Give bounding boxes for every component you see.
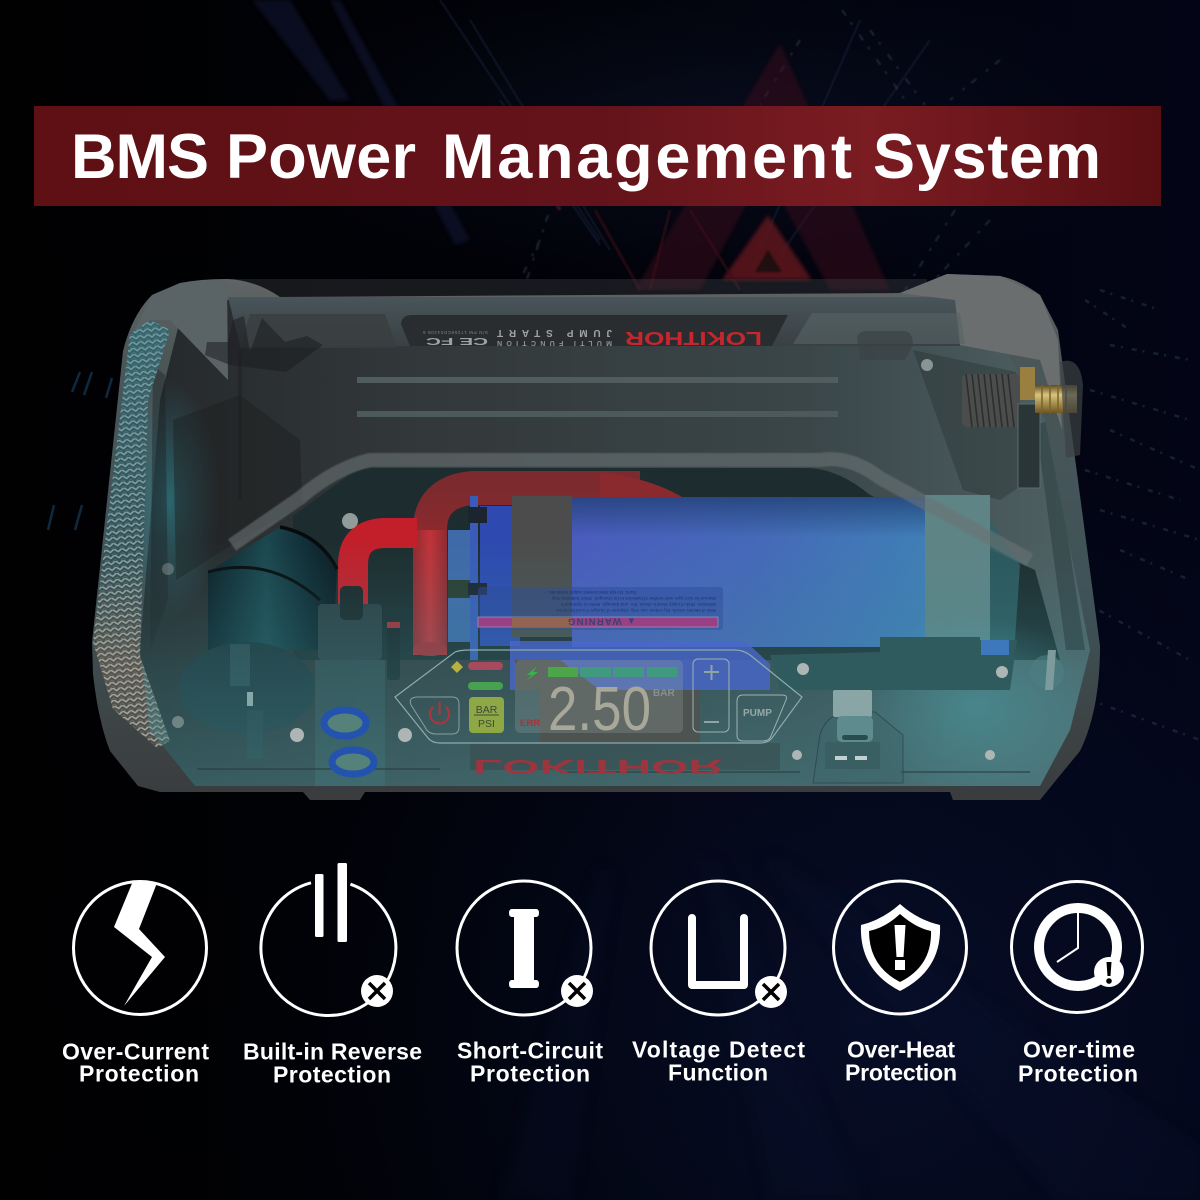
inner cavity [293,468,1060,660]
warning label on battery: ▲ WARNING [568,616,636,626]
LCD display: 2.50 [548,675,651,744]
icon: voltage detect [651,881,787,1015]
label plate on upper wall [401,315,788,348]
label: over-current: Over-Current [62,1038,209,1064]
label: voltage detect: Function [668,1060,768,1086]
warning label on battery: defective. Risk of injury electric shock, fire, and damage. Refer to Operator's [560,602,716,607]
control panel [395,641,802,744]
pump key: PUMP [743,708,772,719]
label: reverse: Built-in Reverse [243,1038,422,1064]
corner lobes [130,274,1062,430]
icon: reverse protection [261,863,396,1016]
protection labels [62,1036,1138,1088]
warning label on battery: Risk of electric shock. Dry indoor use only. Dispose of charger if cord becomes [556,608,716,613]
upper top band [228,297,960,346]
power button [410,697,459,734]
warning label on battery [478,587,723,630]
icon: short circuit [457,881,593,1015]
top strip behind shell [227,279,927,299]
device: translucent jump starter cutaway [92,274,1110,800]
mirrored brand label: CE FC [426,335,488,346]
label: over-time: Protection [1018,1060,1138,1086]
mirrored brand label: MULTI FUNCTION [497,339,612,346]
side data streaks [1080,290,1200,740]
mirrored brand label: JUMP START [497,327,612,338]
air pump motor [179,527,337,758]
red power cables [353,472,682,656]
label: over-time [1018,1036,1138,1086]
ventilation grille on left edge [93,320,170,748]
LCD display: BAR [653,688,675,699]
label: voltage detect [632,1036,805,1086]
left teal glow [120,380,220,620]
brass air connector [962,361,1083,488]
label: over-heat: Over-Heat [847,1036,955,1062]
LCD display: ERR [520,718,540,729]
battery pack [448,495,1020,660]
big red triangle behind title [635,43,890,290]
label: voltage detect: Voltage Detect [632,1036,805,1062]
air outlet rings [324,710,374,774]
status LEDs [468,662,503,670]
label: over-heat [845,1036,957,1086]
BAR/PSI button: BAR [476,704,498,716]
mirrored brand label: S/N PM 17259CD04208 6 [423,330,488,335]
inner face [140,297,1090,786]
icon: over-current [74,881,206,1014]
warning diamond [451,661,463,673]
front screws [162,513,1008,760]
label: over-current [62,1038,209,1086]
LCD display [515,660,683,744]
mirrored front logo: LOKITHOR [473,755,724,777]
icon: over-time clock [1012,882,1142,1012]
warning label on battery: Manual for size type and number of batteries to be changed. Other batteries may [551,596,716,601]
protection icons row [74,863,1142,1016]
teal front face overlay [140,566,1090,786]
mirrored brand label [423,327,762,348]
translucent frame band [232,459,1030,560]
USB port cluster [813,690,903,783]
lower front band [197,743,1030,772]
panel backing tones [510,641,770,690]
title text [71,122,1101,192]
panel outline [395,650,802,743]
right wall highlights [770,422,1085,770]
title text: BMS [71,122,209,192]
BAR/PSI button [469,697,504,733]
label: over-current: Protection [79,1060,199,1086]
BAR/PSI button: PSI [478,718,495,730]
lamp socket and connector [315,586,400,786]
background tech streaks and red warning triangle [48,0,1200,740]
title text: Management [442,122,852,192]
label: short circuit: Short-Circuit [457,1038,603,1064]
fan silhouette and dark internals [150,316,323,650]
label: over-heat: Protection [845,1060,957,1086]
label: reverse [243,1038,422,1088]
label: short circuit: Protection [470,1060,590,1086]
icon: over-heat shield [834,881,966,1014]
title text: Power [226,122,416,192]
device outer shell [92,274,1100,800]
label: reverse: Protection [273,1062,391,1088]
mirrored brand label: LOKITHOR [625,328,762,348]
title text: System [873,122,1101,192]
label: over-time: Over-time [1023,1036,1135,1062]
plus minus keys [693,659,729,732]
pump key [737,695,786,741]
internal rails [357,331,1030,500]
warning label on battery: burst. Do not interconnect output terminals. [548,590,636,595]
title bar [34,106,1161,206]
label: short circuit [457,1038,603,1086]
